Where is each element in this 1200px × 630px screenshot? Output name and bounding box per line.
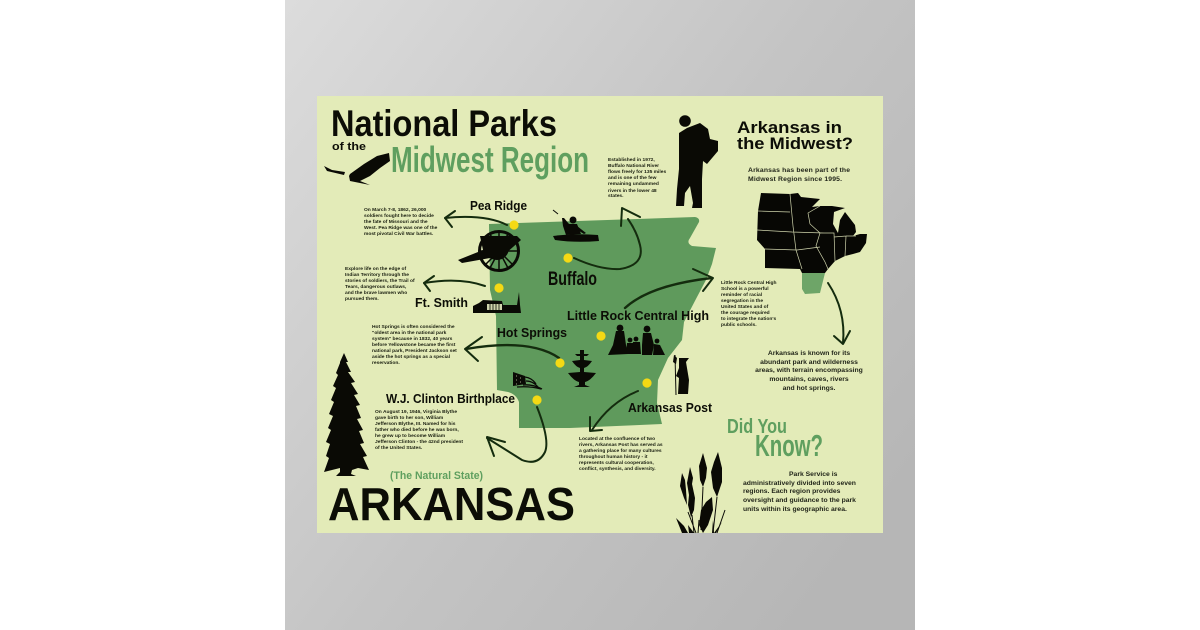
heading: Did You Know: Know? bbox=[755, 428, 823, 463]
text: Buffalo description: remaining undammed bbox=[608, 181, 659, 187]
text: Pea Ridge description: most pivotal Civil War battles. bbox=[364, 231, 434, 237]
text: Arkansas Post description: rivers, Arkansas Post has served as bbox=[579, 442, 663, 448]
text: Midwest since 1995: Midwest Region since 1995. bbox=[748, 176, 842, 183]
arrow: Ft. Smith bbox=[424, 276, 485, 291]
icon: pampas grass bbox=[676, 452, 725, 533]
label: Little Rock Central High: Little Rock Central High bbox=[567, 309, 709, 323]
label: Buffalo: Buffalo bbox=[548, 269, 597, 290]
text: Midwest since 1995: Arkansas has been part of the bbox=[748, 167, 850, 174]
arrow: Little Rock bbox=[625, 269, 713, 308]
text: Park Service: units within its geographic area. bbox=[743, 506, 847, 513]
arrow: Buffalo bbox=[574, 208, 641, 269]
text: Pea Ridge description: West. Pea Ridge was one of the bbox=[364, 225, 438, 231]
icon: soldier with pike bbox=[673, 355, 689, 395]
text: Little Rock description: United States and of bbox=[721, 304, 769, 310]
text: Pea Ridge description: soldiers fought here to decide bbox=[364, 213, 434, 219]
text: Ft. Smith description bbox=[345, 266, 415, 302]
text: Clinton description: gave birth to her son, William bbox=[375, 415, 444, 421]
text: Ft. Smith description: Explore life on the edge of bbox=[345, 266, 407, 272]
text: Little Rock description: the courage required bbox=[721, 310, 770, 316]
text: Hot Springs description: reservation. bbox=[372, 360, 400, 366]
title: of the bbox=[332, 141, 366, 153]
text: Ft. Smith description: Indian Territory through the bbox=[345, 272, 409, 278]
text: Clinton description: Jefferson Blythe, III. Named for his bbox=[375, 421, 456, 427]
text: Ft. Smith description: and the brave lawmen who bbox=[345, 290, 407, 296]
text: Clinton description: father who died before he was born, bbox=[375, 427, 459, 433]
heading: Did You Know bbox=[727, 416, 823, 463]
text: Hot Springs description: national park, President Jackson set bbox=[372, 348, 457, 354]
text: Ft. Smith description: pursued them. bbox=[345, 296, 379, 302]
label: Arkansas Post: Arkansas Post bbox=[628, 401, 713, 415]
heading: Did You Know: Did You bbox=[727, 416, 787, 438]
icon: eagle bbox=[324, 153, 390, 185]
text: Hot Springs description: before Yellowstone became the first bbox=[372, 342, 456, 348]
text: Park Service: oversight and guidance to the park bbox=[743, 497, 856, 504]
icon: family silhouettes bbox=[608, 325, 665, 355]
text: Ft. Smith description: Tears, dangerous outlaws, bbox=[345, 284, 407, 290]
map of Arkansas bbox=[489, 217, 716, 428]
text: abundant parks: areas, with terrain encompassing bbox=[755, 367, 863, 374]
text: Buffalo description: states. bbox=[608, 193, 624, 199]
arrow: Pea Ridge bbox=[445, 211, 507, 227]
icon: fort building bbox=[473, 292, 521, 313]
text: Buffalo description: and is one of the few bbox=[608, 175, 657, 181]
icon: cannon bbox=[458, 232, 521, 270]
text: Arkansas Post description: represents cultural cooperation, bbox=[579, 460, 654, 466]
text: Arkansas Post description: Located at the confluence of two bbox=[579, 436, 655, 442]
text: Ft. Smith description: stories of soldiers, the Trail of bbox=[345, 278, 415, 284]
text: Little Rock description: segregation in the bbox=[721, 298, 763, 304]
text: abundant parks: mountains, caves, rivers bbox=[769, 376, 849, 383]
poster background bbox=[317, 96, 883, 533]
text: Clinton description: On August 19, 1946, Virginia Blythe bbox=[375, 409, 457, 415]
arrow: Midwest to park text bbox=[828, 283, 850, 344]
map: Midwest states bbox=[757, 193, 867, 294]
text: Buffalo description: Established in 1972, bbox=[608, 157, 655, 163]
text: Buffalo description: Buffalo National River bbox=[608, 163, 659, 169]
text: The Natural State: (The Natural State) bbox=[390, 470, 483, 482]
label: W.J. Clinton Birthplace: W.J. Clinton Birthplace bbox=[386, 392, 515, 406]
yellow park markers bbox=[494, 220, 652, 405]
text: Park Service: Park Service is bbox=[789, 471, 838, 478]
text: Buffalo description: rivers in the lower 48 bbox=[608, 188, 657, 194]
text: Clinton description: he grew up to become William bbox=[375, 433, 446, 439]
text: Park Service: regions. Each region provides bbox=[743, 488, 841, 495]
text: abundant parks: abundant park and wilderness bbox=[760, 359, 858, 366]
text: Arkansas Post description: throughout human history - it bbox=[579, 454, 648, 460]
text: abundant parks: Arkansas is known for its bbox=[768, 350, 850, 357]
text: Little Rock description: to integrate the nation's bbox=[721, 316, 777, 322]
icon: pine tree bbox=[324, 353, 369, 476]
text: Little Rock description: reminder of racial bbox=[721, 292, 763, 298]
text: Pea Ridge description: On March 7-8, 1862, 26,000 bbox=[364, 207, 427, 213]
text: Pea Ridge description bbox=[364, 207, 438, 237]
text: Hot Springs description: system" because in 1832, 40 years bbox=[372, 336, 453, 342]
text: Buffalo description bbox=[608, 157, 666, 199]
text: Midwest since 1995 bbox=[748, 167, 850, 183]
text: Clinton description: Jefferson Clinton - the 42nd president bbox=[375, 439, 463, 445]
arrow: Clinton bbox=[487, 407, 546, 462]
text: Clinton description: of the United States. bbox=[375, 445, 423, 451]
title bbox=[331, 103, 589, 180]
title: National Parks bbox=[331, 103, 557, 144]
heading: ARKANSAS: ARKANSAS bbox=[328, 478, 575, 530]
text: Hot Springs description: Hot Springs is often considered the bbox=[372, 324, 455, 330]
text: Pea Ridge description: the fate of Missouri and the bbox=[364, 219, 428, 225]
title: Midwest Region bbox=[391, 139, 589, 180]
text: Hot Springs description: "oldest area in the national park bbox=[372, 330, 447, 336]
icon: American flag bbox=[513, 372, 542, 389]
heading: Arkansas in the Midwest: the Midwest? bbox=[737, 134, 853, 153]
label: Ft. Smith: Ft. Smith bbox=[415, 296, 468, 310]
text: Hot Springs description: aside the hot springs as a special bbox=[372, 354, 451, 360]
text: Little Rock description: Little Rock Central High bbox=[721, 280, 776, 286]
text: Buffalo description: flows freely for 135 miles bbox=[608, 169, 666, 175]
icon: fountain bbox=[568, 350, 596, 387]
text: Little Rock description: public schools. bbox=[721, 322, 757, 328]
text: Little Rock description bbox=[721, 280, 777, 328]
text: abundant parks: and hot springs. bbox=[783, 385, 836, 392]
text: Little Rock description: School is a powerful bbox=[721, 286, 769, 292]
text: Arkansas Post description: a gathering place for many cultures bbox=[579, 448, 662, 454]
text: Park Service: administratively divided into seven bbox=[743, 480, 856, 487]
label: Hot Springs: Hot Springs bbox=[497, 326, 567, 340]
heading: Arkansas in the Midwest: Arkansas in bbox=[737, 118, 842, 137]
arrow: Arkansas Post bbox=[590, 391, 638, 431]
label: Pea Ridge: Pea Ridge bbox=[470, 199, 527, 213]
text: Park Service bbox=[743, 471, 856, 513]
icon: hiker bbox=[676, 115, 718, 208]
text: Arkansas Post description bbox=[579, 436, 663, 472]
text: Arkansas Post description: conflict, synthesis, and diversity. bbox=[579, 466, 656, 472]
text: abundant parks bbox=[755, 350, 863, 392]
arrow: Hot Springs bbox=[465, 337, 559, 361]
icon: kayaker bbox=[553, 210, 599, 242]
heading: Arkansas in the Midwest bbox=[737, 118, 853, 153]
text: Clinton description bbox=[375, 409, 463, 451]
text: Hot Springs description bbox=[372, 324, 457, 366]
